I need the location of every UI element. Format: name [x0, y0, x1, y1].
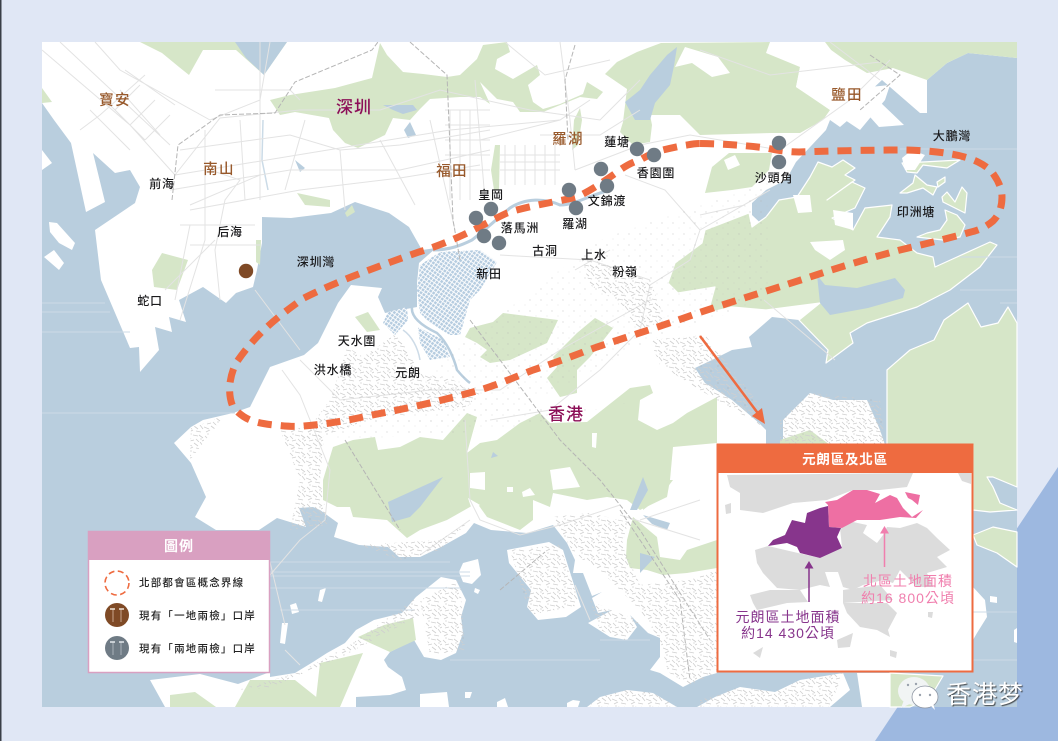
dashed boundary: Northern Metropolis concept line	[230, 144, 1002, 426]
white clearings in central hills	[468, 433, 597, 510]
water: Mirs Bay and Tolo Harbour	[695, 53, 1017, 707]
city labels: 香港	[548, 405, 584, 424]
legend item: two-site port: 現有「兩地兩檢」口岸	[139, 642, 256, 655]
arrow: North district	[880, 526, 889, 567]
inset title: 元朗區及北區	[802, 452, 888, 467]
district labels: Shenzhen: 南山	[203, 161, 235, 178]
place labels: 皇岡	[478, 187, 504, 202]
district labels: Shenzhen: 鹽田	[831, 87, 863, 104]
checkpoint: co-location (brown)	[239, 264, 253, 278]
district labels: Shenzhen: 羅湖	[552, 131, 584, 148]
place labels: 大鵬灣	[933, 128, 971, 143]
arrow: Yuen Long	[804, 561, 814, 602]
legend item: co-location port	[105, 603, 256, 627]
legend header	[88, 531, 270, 560]
inset region: North district	[825, 490, 923, 528]
checkpoints: two-site inspection (grey)	[469, 136, 786, 250]
place labels: 蓮塘	[604, 134, 630, 149]
rail lines	[172, 42, 900, 680]
sparse building specks	[290, 180, 770, 440]
place labels: 羅湖	[562, 216, 588, 231]
land: north-east New Territories	[668, 160, 997, 363]
Yuen Long area text	[736, 609, 840, 641]
place labels	[137, 128, 971, 380]
place labels: 沙頭角	[755, 171, 793, 185]
fish ponds and rivers	[262, 120, 610, 383]
inset header	[717, 444, 973, 473]
district labels: Shenzhen: 寶安	[99, 91, 131, 109]
white villages in north-east	[793, 150, 925, 260]
legend item: concept boundary: 北部都會區概念界線	[139, 576, 244, 589]
urban texture	[190, 255, 885, 707]
place labels: 粉嶺	[612, 265, 638, 279]
place labels: 落馬洲	[501, 221, 539, 235]
place labels: 前海	[149, 176, 175, 191]
green: central New Territories	[323, 313, 830, 575]
North district area text	[861, 573, 955, 606]
place labels: 深圳灣	[297, 255, 335, 269]
legend item: two-site port	[105, 636, 256, 660]
islands: Double Haven	[900, 160, 967, 240]
green: Shenzhen hills	[42, 42, 1017, 332]
city labels: 深圳	[336, 98, 372, 117]
inset base map	[725, 473, 971, 658]
place labels: 天水圍	[338, 333, 376, 348]
white clearings in the hills	[675, 42, 890, 170]
inset region: Yuen Long district	[768, 506, 842, 558]
place labels: 香園圍	[637, 166, 675, 180]
road network	[42, 42, 890, 665]
panel: legend	[88, 531, 270, 672]
legend item: co-location port: 現有「一地兩檢」口岸	[139, 609, 256, 622]
land: west shore details	[42, 150, 581, 644]
Yuen Long area text: 元朗區土地面積	[736, 609, 840, 625]
place labels: 文錦渡	[588, 193, 626, 208]
place labels: 后海	[217, 225, 243, 239]
North district area text: 北區土地面積	[863, 573, 953, 589]
place labels: 洪水橋	[314, 362, 352, 377]
place labels: 元朗	[395, 365, 421, 380]
place labels: 古洞	[532, 243, 558, 258]
legend item: concept boundary	[105, 571, 244, 595]
arrow: boundary to inset	[700, 336, 765, 424]
place labels: 蛇口	[137, 293, 163, 308]
place labels: 印洲塘	[897, 204, 935, 219]
district labels: Shenzhen: 福田	[436, 163, 468, 180]
watermark text: 香港梦	[946, 681, 1024, 709]
North district area text: 約16 800公頃	[861, 590, 955, 606]
Yuen Long area text: 約14 430公頃	[741, 625, 835, 641]
panel: Yuen Long and North districts inset	[717, 444, 973, 672]
city labels	[336, 98, 584, 424]
place labels: 新田	[476, 266, 502, 281]
district labels: Shenzhen	[99, 87, 863, 180]
land: Lantau and southern islands	[150, 577, 943, 707]
legend title: 圖例	[164, 538, 194, 554]
pale sea lanes	[42, 149, 1017, 660]
place labels: 上水	[581, 247, 607, 262]
reservoirs	[235, 42, 905, 573]
water: Shenzhen Bay and west sea	[42, 103, 717, 707]
icon: WeChat watermark	[898, 677, 938, 710]
land: Sai Kung and east	[887, 303, 1017, 512]
